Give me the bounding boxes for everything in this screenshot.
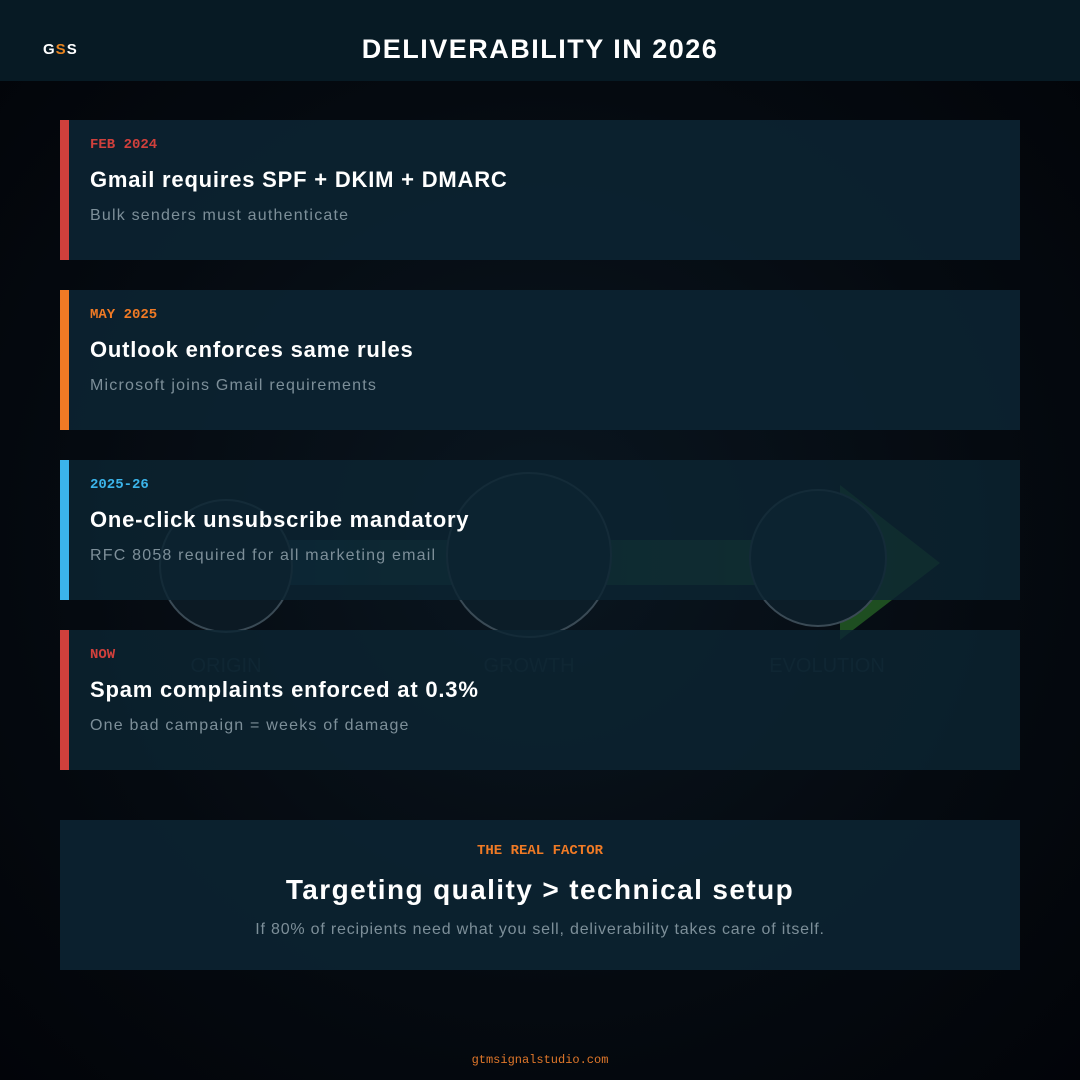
card: may 2025: MAY 2025 [90,307,157,323]
card: may 2025 [60,290,1020,430]
background graphic: ORIGIN [190,655,262,677]
card: 2025-26 [60,460,1020,600]
header [0,0,1080,81]
panel: real factor: THE REAL FACTOR [477,843,603,859]
background graphic: EVOLUTION [769,655,885,677]
card: now: NOW [90,647,115,663]
background graphic: GROWTH [483,655,575,677]
panel: real factor: If 80% of recipients need what you sell, deliverability takes care of itself. [255,921,825,938]
card: 2025-26: One-click unsubscribe mandatory [90,507,469,532]
title: DELIVERABILITY IN 2026 [362,34,718,64]
card: may 2025: Outlook enforces same rules [90,337,414,362]
card: feb 2024 [60,120,1020,260]
panel: real factor [60,820,1020,970]
card: now: One bad campaign = weeks of damage [90,717,410,734]
footer: gtmsignalstudio.com [472,1053,608,1067]
card: feb 2024: Bulk senders must authenticate [90,207,349,224]
card: 2025-26: RFC 8058 required for all marketing email [90,547,436,564]
card: feb 2024: Gmail requires SPF + DKIM + DMARC [90,167,508,192]
card: 2025-26: 2025-26 [90,477,149,493]
card: may 2025: Microsoft joins Gmail requirements [90,377,377,394]
panel: real factor: Targeting quality > technical setup [286,874,794,905]
card: feb 2024: FEB 2024 [90,137,157,153]
card: now [60,630,1020,770]
logo: GSS [43,41,78,58]
card: now: Spam complaints enforced at 0.3% [90,677,479,702]
